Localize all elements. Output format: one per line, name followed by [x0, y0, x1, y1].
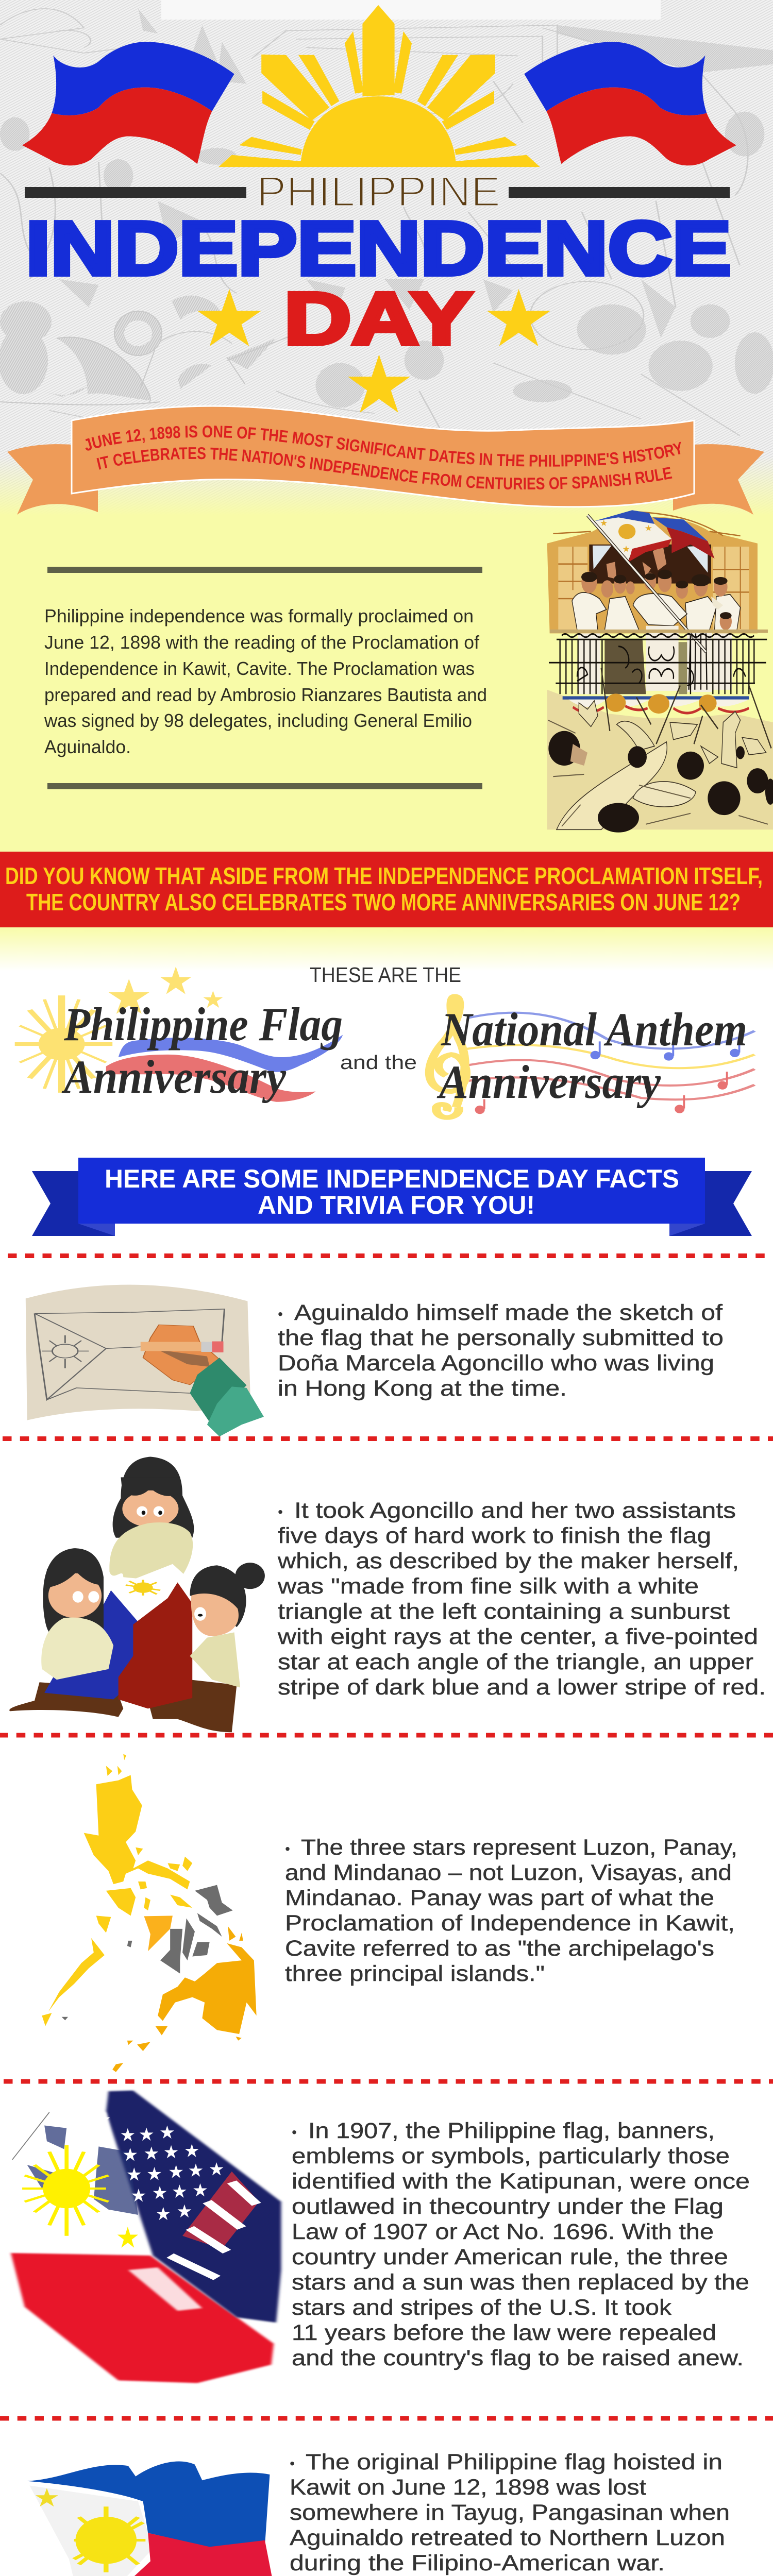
text block: fact three stars: three principal islands." [285, 1961, 545, 1986]
text block: proclamation: prepared and read by Ambrosio Rianzares Bautista and [44, 684, 487, 705]
text block: fact sketch: the flag that he personally submitted to [278, 1326, 724, 1350]
callout: blue ribbon facts heading [32, 1158, 752, 1236]
text block: fact lost flag: The original Philippine flag hoisted in [306, 2450, 722, 2475]
text block: fact 1907: identified with the Katipunan, were once [292, 2169, 750, 2194]
text block: fact 1907: emblems or symbols, particularly those [292, 2144, 730, 2168]
illustration: three women sewing flag [9, 1457, 265, 1732]
illustration: Philippine flag replaced by US flag [11, 2091, 281, 2383]
text block: fact 1907: • [292, 2124, 297, 2140]
title: Philippine [25, 168, 730, 215]
text block: fact 1907: country under American rule, the three [292, 2245, 728, 2269]
icon: anthem anniversary music art [429, 996, 754, 1117]
illustration: balcony proclamation [547, 510, 773, 833]
text block: fact five days: five days of hard work to finish the flag [278, 1523, 711, 1548]
text block: fact three stars [285, 1835, 737, 1986]
panel: yellow background [0, 515, 773, 852]
text block: proclamation: Independence in Kawit, Cavite. The Proclamation was [44, 658, 475, 679]
heading: National Anthem Anniversary: National Anthem [441, 1003, 747, 1056]
text block: fact 1907: stars and a sun was then replaced by the [292, 2270, 749, 2295]
text block: fact 1907: and the country's flag to be raised anew. [292, 2346, 744, 2370]
text block: fact 1907: stars and stripes of the U.S. It took [292, 2295, 672, 2320]
illustration: Philippine map [42, 1754, 257, 2072]
text block: fact five days: • [278, 1504, 283, 1520]
text block: fact lost flag: Aguinaldo retreated to Northern Luzon [290, 2526, 725, 2550]
panel: did you know band [0, 852, 773, 927]
background fade [0, 927, 773, 971]
text block: fact three stars: Proclamation of Independence in Kawit, [285, 1911, 735, 1936]
text block: fact five days: was "made from fine silk with a white [277, 1574, 699, 1599]
heading: National Anthem Anniversary [436, 1003, 747, 1108]
text block: fact sketch: Doña Marcela Agoncillo who was living [278, 1351, 714, 1376]
icon: Philippine flag right [524, 42, 736, 165]
text block: fact 1907: Law of 1907 or Act No. 1696. With the [292, 2219, 714, 2244]
text block: fact three stars: The three stars represent Luzon, Panay, [301, 1835, 737, 1860]
heading: Philippine Flag Anniversary: Philippine Flag [63, 998, 343, 1050]
text block: fact sketch: • [278, 1306, 283, 1322]
text block: fact lost flag: Kawit on June 12, 1898 was lost [290, 2475, 646, 2500]
text block: fact lost flag: somewhere in Tayug, Pangasinan when [290, 2500, 730, 2525]
title: Independence: INDEPENDENCE [26, 206, 731, 291]
heading: Philippine Flag Anniversary [61, 998, 343, 1103]
text block: fact five days: It took Agoncillo and her two assistants [294, 1498, 736, 1523]
text block: fact three stars: Cavite referred to as "the archipelago's [285, 1936, 714, 1961]
text block: proclamation: June 12, 1898 with the reading of the Proclamation of [44, 632, 480, 653]
text block: fact five days: which, as described by the maker herself, [277, 1549, 739, 1573]
text block: fact 1907: 11 years before the law were repealed [292, 2320, 716, 2345]
text block: fact three stars: and Mindanao – not Luzon, Visayas, and [285, 1860, 732, 1885]
text block: fact sketch: in Hong Kong at the time. [278, 1376, 567, 1401]
text block: fact three stars: • [285, 1841, 290, 1857]
text block: fact 1907: In 1907, the Philippine flag, banners, [308, 2119, 715, 2143]
text block: fact five days: triangle at the left containing a sunburst [278, 1599, 730, 1624]
text block: proclamation: Philippine independence was formally proclaimed on [44, 605, 474, 626]
text block: proclamation [44, 567, 487, 789]
icon: Philippine flag left [22, 42, 234, 165]
text block: fact 1907 [292, 2119, 750, 2370]
callout: blue ribbon facts heading: HERE ARE SOME INDEPENDENCE DAY FACTS [105, 1164, 679, 1193]
icon: sunburst [219, 5, 540, 167]
text block: fact five days [277, 1498, 766, 1700]
text block: proclamation: was signed by 98 delegates, including General Emilio [44, 710, 472, 731]
text block: fact lost flag: • [290, 2455, 295, 2471]
text block: proclamation: Aguinaldo. [44, 736, 131, 757]
callout: orange ribbon banner [7, 405, 764, 515]
icon: flag anniversary art [15, 967, 343, 1102]
icon: three stars [197, 289, 550, 413]
callout: blue ribbon facts heading: AND TRIVIA FOR YOU! [258, 1191, 535, 1219]
text: and the: and the [340, 1052, 417, 1074]
text block: fact sketch [278, 1300, 724, 1401]
text block: fact three stars: Mindanao. Panay was part of what the [285, 1886, 714, 1910]
heading: Philippine Flag Anniversary: Anniversary [61, 1050, 287, 1103]
text block: fact sketch: Aguinaldo himself made the sketch of [294, 1300, 723, 1325]
text block: fact lost flag: during the Filipino-American war. [290, 2551, 665, 2575]
text block: fact five days: star at each angle of the triangle, an upper [278, 1650, 753, 1674]
title: Day: DAY [284, 277, 473, 360]
white strip at top [161, 0, 661, 20]
text block: fact five days: stripe of dark blue and a lower stripe of red. [278, 1675, 766, 1700]
panel: header background engraving [0, 0, 773, 515]
illustration: waving Philippine flag [27, 2462, 278, 2576]
illustration: flag sketch and hand [26, 1285, 264, 1436]
text block: fact lost flag [290, 2450, 769, 2576]
title: Philippine: PHILIPPINE [257, 168, 500, 215]
heading: these are the: THESE ARE THE [310, 963, 461, 987]
text block: fact 1907: outlawed in thecountry under the Flag [292, 2194, 724, 2219]
text block: fact five days: with eight rays at the center, a five-pointed [277, 1624, 758, 1649]
heading: National Anthem Anniversary: Anniversary [436, 1056, 661, 1108]
